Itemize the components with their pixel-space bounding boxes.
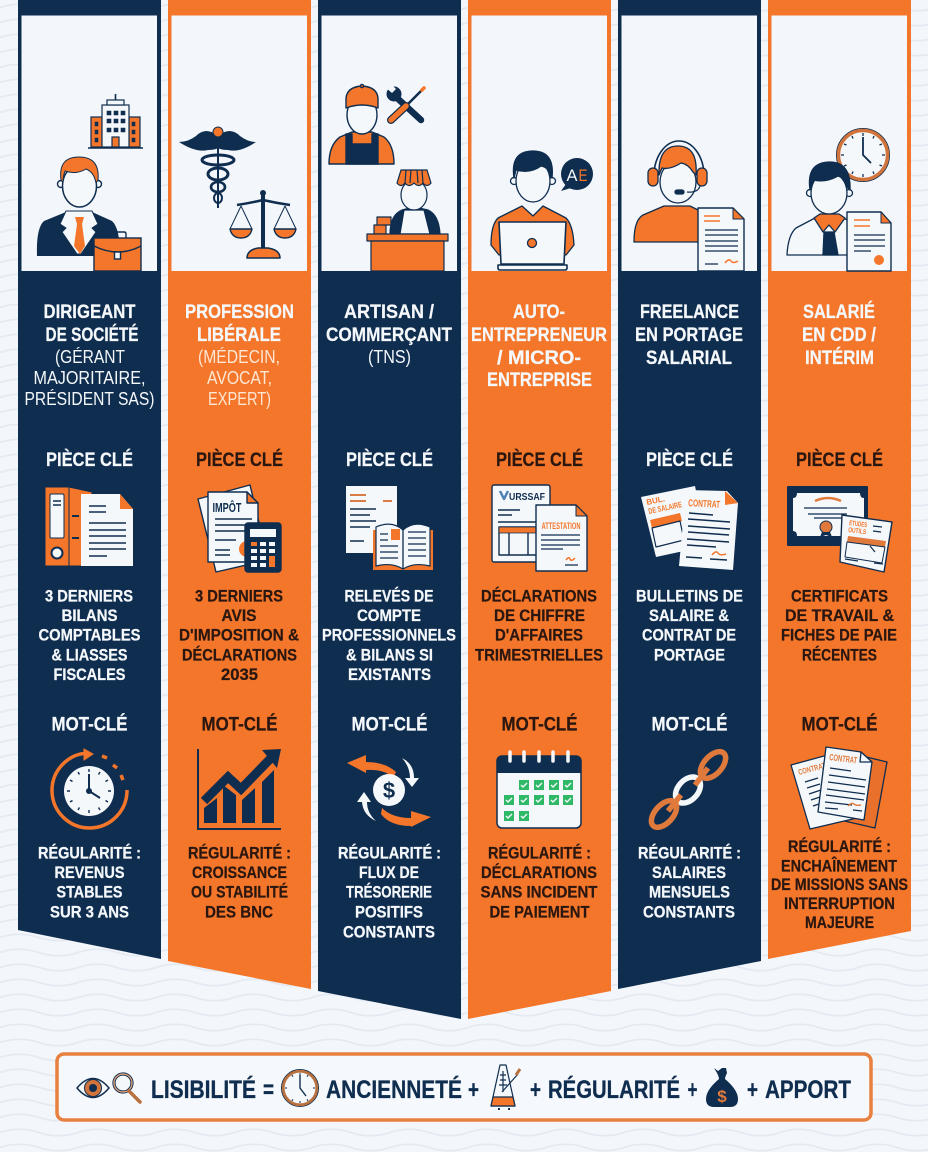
column 2: profession libérale [168, 0, 311, 989]
text: pièce clé 1: 3 DERNIERS [45, 588, 133, 606]
illustration panel 2 [172, 16, 307, 271]
column 4: auto-entrepreneur [468, 0, 611, 1019]
illustration panel 5 [622, 16, 757, 271]
icon: contracts stack [791, 747, 887, 829]
title: artisan commerçant [326, 301, 452, 367]
text: régularité 6: DE MISSIONS SANS [771, 876, 908, 894]
text: régularité 3: RÉGULARITÉ : [338, 844, 441, 862]
column 6: salarié cdd intérim [768, 0, 911, 959]
text: pièce clé 4: TRIMESTRIELLES [475, 646, 603, 664]
title: freelance portage: SALARIAL [646, 347, 732, 369]
icon: office building [88, 94, 143, 148]
icon: certificate and payslip: OUTILS [848, 527, 867, 536]
text: pièce clé 2: D'IMPOSITION & [179, 626, 299, 644]
icon: money bag: $ [717, 1087, 727, 1106]
ribbon 3 [318, 0, 461, 1019]
title: salarié cdd intérim: EN CDD / [802, 324, 876, 346]
icon: payslip and contract: CONTRAT [688, 498, 720, 511]
icon: contracts stack: CONTRAT [829, 752, 858, 765]
text: pièce clé 6: FICHES DE PAIE [781, 626, 897, 644]
text: régularité 2: CROISSANCE [192, 864, 287, 882]
text: pièce clé 2: AVIS [222, 607, 256, 625]
text: pièce clé 1: COMPTABLES [38, 626, 140, 644]
title: auto-entrepreneur [471, 301, 607, 391]
text: régularité 1: RÉGULARITÉ : [38, 844, 141, 862]
text: pièce clé 2 [179, 588, 299, 684]
title: artisan commerçant: COMMERÇANT [326, 324, 452, 346]
illustration panel 3 [322, 16, 457, 271]
text: régularité 5 [638, 844, 741, 922]
title: auto-entrepreneur: AUTO- [513, 301, 565, 323]
formula: + régularité +: + [530, 1076, 541, 1104]
formula: + apport: + [747, 1076, 758, 1104]
text: régularité 4: SANS INCIDENT [480, 884, 598, 902]
icon: contracts stack: CONTRAT [797, 761, 827, 777]
text: pièce clé 6 [781, 588, 897, 664]
text: pièce clé 2: 3 DERNIERS [195, 588, 283, 606]
icon: binder and document [45, 487, 133, 566]
icon: clock [282, 1070, 318, 1106]
formula: lisibilité =: = [263, 1076, 274, 1104]
text: régularité 5: MENSUELS [649, 884, 730, 902]
subtitle: médecin avocat expert [198, 347, 280, 409]
formula: ancienneté +: + [468, 1076, 479, 1104]
text: pièce clé 1 [38, 588, 140, 684]
icon: chain links [647, 747, 730, 832]
icon: AE speech bubble [561, 158, 593, 191]
text: pièce clé 4 [475, 586, 603, 664]
text: régularité 4: DÉCLARATIONS [481, 863, 597, 882]
subtitle: médecin avocat expert: AVOCAT, [207, 368, 272, 388]
formula: lisibilité =: LISIBILITÉ [151, 1075, 256, 1104]
heading: pièce clé 1: PIÈCE CLÉ [46, 449, 133, 471]
heading: pièce clé 6: PIÈCE CLÉ [796, 449, 883, 471]
text: régularité 1 [38, 844, 141, 922]
text: pièce clé 1: & LIASSES [52, 646, 128, 664]
title: artisan commerçant: ARTISAN / [344, 301, 435, 323]
icon: payslip and contract: DE SALAIRE [648, 500, 683, 516]
title: dirigeant: DIRIGEANT [44, 301, 136, 323]
title: dirigeant: DE SOCIÉTÉ [46, 323, 138, 346]
icon: bank statement and open book [346, 486, 433, 570]
text: pièce clé 1: BILANS [62, 607, 118, 625]
text: pièce clé 4: DE CHIFFRE [494, 607, 585, 625]
icon: certificate and payslip: ETUDES [849, 520, 868, 529]
text: régularité 6: RÉGULARITÉ : [788, 837, 891, 856]
title: dirigeant: PRÉSIDENT SAS) [24, 389, 154, 409]
icon: clock with arrow [52, 749, 127, 828]
icon: magnifying glass [114, 1074, 140, 1102]
text: régularité 5: SALAIRES [652, 864, 726, 882]
formula banner [57, 1054, 871, 1120]
icon: signed document [847, 212, 891, 271]
text: pièce clé 5: BULLETINS DE [636, 588, 743, 606]
text: pièce clé 2: DÉCLARATIONS [182, 646, 297, 664]
title: auto-entrepreneur: ENTREPRENEUR [471, 324, 607, 346]
ribbon 5 [618, 0, 761, 989]
ribbon 1 [18, 0, 161, 959]
icon: person with headset [634, 141, 707, 242]
title: freelance portage: FREELANCE [640, 301, 739, 323]
icon: worker with overalls [329, 84, 394, 164]
icon: growth chart [198, 749, 281, 829]
text: régularité 4: DE PAIEMENT [490, 904, 590, 922]
text: régularité 1: SUR 3 ANS [50, 904, 129, 922]
text: régularité 3 [338, 844, 441, 942]
text: régularité 2: DES BNC [205, 904, 273, 922]
text: pièce clé 3: PROFESSIONNELS [322, 626, 456, 644]
text: pièce clé 2: 2035 [221, 666, 258, 684]
text: pièce clé 6: CERTIFICATS [791, 588, 888, 606]
icon: money bag [706, 1068, 738, 1107]
text: pièce clé 3: & BILANS SI [346, 646, 433, 664]
text: pièce clé 1: FISCALES [54, 666, 126, 684]
text: pièce clé 6: RÉCENTES [802, 646, 877, 664]
title: dirigeant [24, 301, 154, 409]
text: régularité 3: POSITIFS [355, 904, 423, 922]
formula: + régularité +: RÉGULARITÉ [548, 1075, 680, 1104]
icon: contract document [698, 208, 744, 271]
icon: tax notice and calculator [198, 485, 281, 572]
text: régularité 2 [188, 844, 291, 922]
icon: person with laptop [491, 151, 574, 270]
icon: wrench and screwdriver [385, 84, 424, 120]
icon: employee with tie [787, 162, 852, 255]
icon: executive in suit [37, 157, 120, 256]
text: régularité 6: INTERRUPTION [784, 895, 895, 913]
icon: wall clock [836, 128, 890, 182]
icon: cash flow arrows [347, 755, 431, 827]
heading: pièce clé 3: PIÈCE CLÉ [346, 449, 433, 471]
text: pièce clé 3 [322, 586, 456, 684]
heading: mot-clé 2: MOT-CLÉ [202, 714, 278, 736]
icon: certificate and payslip [787, 486, 892, 572]
icon: AE speech bubble: E [578, 166, 588, 185]
illustration panel 4 [472, 16, 607, 271]
text: régularité 5: CONSTANTS [643, 904, 735, 922]
title: auto-entrepreneur: / MICRO- [497, 347, 581, 369]
icon: tax notice and calculator: IMPÔT [212, 500, 242, 515]
title: dirigeant: (GÉRANT [55, 347, 125, 367]
subtitle: médecin avocat expert: EXPERT) [208, 389, 271, 409]
icon: AE speech bubble: A [566, 166, 578, 185]
text: pièce clé 4: D'AFFAIRES [495, 626, 583, 644]
text: pièce clé 5: SALAIRE & [649, 607, 729, 625]
heading: mot-clé 5: MOT-CLÉ [652, 714, 728, 736]
text: pièce clé 6: DE TRAVAIL & [785, 607, 894, 625]
title: freelance portage [635, 301, 743, 369]
icon: cash flow arrows: $ [383, 778, 395, 803]
text: régularité 6: ENCHAÎNEMENT [781, 856, 897, 876]
text: pièce clé 4: DÉCLARATIONS [481, 586, 597, 606]
icon: payslip and contract [641, 486, 738, 570]
heading: mot-clé 1: MOT-CLÉ [52, 714, 128, 736]
icon: scales of justice [230, 190, 296, 258]
title: auto-entrepreneur: ENTREPRISE [487, 369, 592, 391]
heading: mot-clé 4: MOT-CLÉ [502, 714, 578, 736]
title: artisan commerçant: (TNS) [368, 347, 411, 367]
text: régularité 4 [480, 844, 598, 922]
icon: urssaf documents: URSSAF [509, 492, 545, 503]
text: pièce clé 5: CONTRAT DE [642, 626, 736, 644]
text: régularité 3: FLUX DE [359, 864, 419, 882]
text: régularité 1: REVENUS [54, 864, 124, 882]
text: pièce clé 3: COMPTE [357, 607, 421, 625]
title: salarié cdd intérim: INTÉRIM [805, 346, 874, 369]
column 5: freelance portage [618, 0, 761, 989]
illustration panel 6 [772, 16, 907, 271]
text: pièce clé 3: RELEVÉS DE [344, 586, 434, 606]
banner frame [57, 1054, 871, 1120]
text: pièce clé 3: EXISTANTS [348, 666, 431, 684]
formula: + apport: APPORT [765, 1076, 851, 1104]
formula: ancienneté +: ANCIENNETÉ [326, 1075, 462, 1104]
ribbon 6 [768, 0, 911, 959]
text: régularité 2: RÉGULARITÉ : [188, 844, 291, 862]
text: régularité 3: CONSTANTS [343, 924, 435, 942]
text: régularité 1: STABLES [56, 884, 122, 902]
icon: eye [77, 1078, 109, 1098]
icon: caduceus [179, 127, 256, 208]
title: dirigeant: MAJORITAIRE, [34, 368, 146, 388]
heading: pièce clé 4: PIÈCE CLÉ [496, 449, 583, 471]
icon: briefcase [94, 232, 141, 271]
column 1: dirigeant de société [18, 0, 161, 959]
ribbon 4 [468, 0, 611, 1019]
text: régularité 5: RÉGULARITÉ : [638, 844, 741, 862]
title: profession libérale: LIBÉRALE [197, 323, 281, 346]
text: régularité 2: OU STABILITÉ [191, 882, 288, 902]
heading: mot-clé 3: MOT-CLÉ [352, 714, 428, 736]
text: pièce clé 5 [636, 588, 743, 664]
icon: urssaf documents [492, 485, 587, 571]
icon: calendar with checks [497, 752, 581, 828]
illustration panel 1 [22, 16, 157, 271]
title: profession libérale [185, 301, 294, 346]
formula: + régularité +: + [688, 1076, 698, 1104]
text: régularité 3: TRÉSORERIE [346, 882, 432, 902]
title: freelance portage: EN PORTAGE [635, 324, 743, 346]
text: régularité 6 [771, 837, 908, 932]
title: profession libérale: PROFESSION [185, 301, 294, 323]
icon: metronome [491, 1065, 520, 1109]
ribbon 2 [168, 0, 311, 989]
column 3: artisan commerçant [318, 0, 461, 1019]
heading: pièce clé 2: PIÈCE CLÉ [196, 449, 283, 471]
text: régularité 6: MAJEURE [805, 914, 874, 932]
icon: shopkeeper at counter [367, 170, 448, 271]
heading: mot-clé 6: MOT-CLÉ [802, 714, 878, 736]
text: régularité 4: RÉGULARITÉ : [488, 844, 591, 862]
title: salarié cdd intérim: SALARIÉ [803, 300, 875, 323]
icon: payslip and contract: BUL. [646, 494, 666, 507]
title: salarié cdd intérim [802, 300, 876, 369]
heading: pièce clé 5: PIÈCE CLÉ [646, 449, 733, 471]
text: pièce clé 5: PORTAGE [654, 646, 725, 664]
subtitle: médecin avocat expert: (MÉDECIN, [198, 347, 280, 367]
icon: urssaf documents: ATTESTATION [542, 521, 580, 531]
